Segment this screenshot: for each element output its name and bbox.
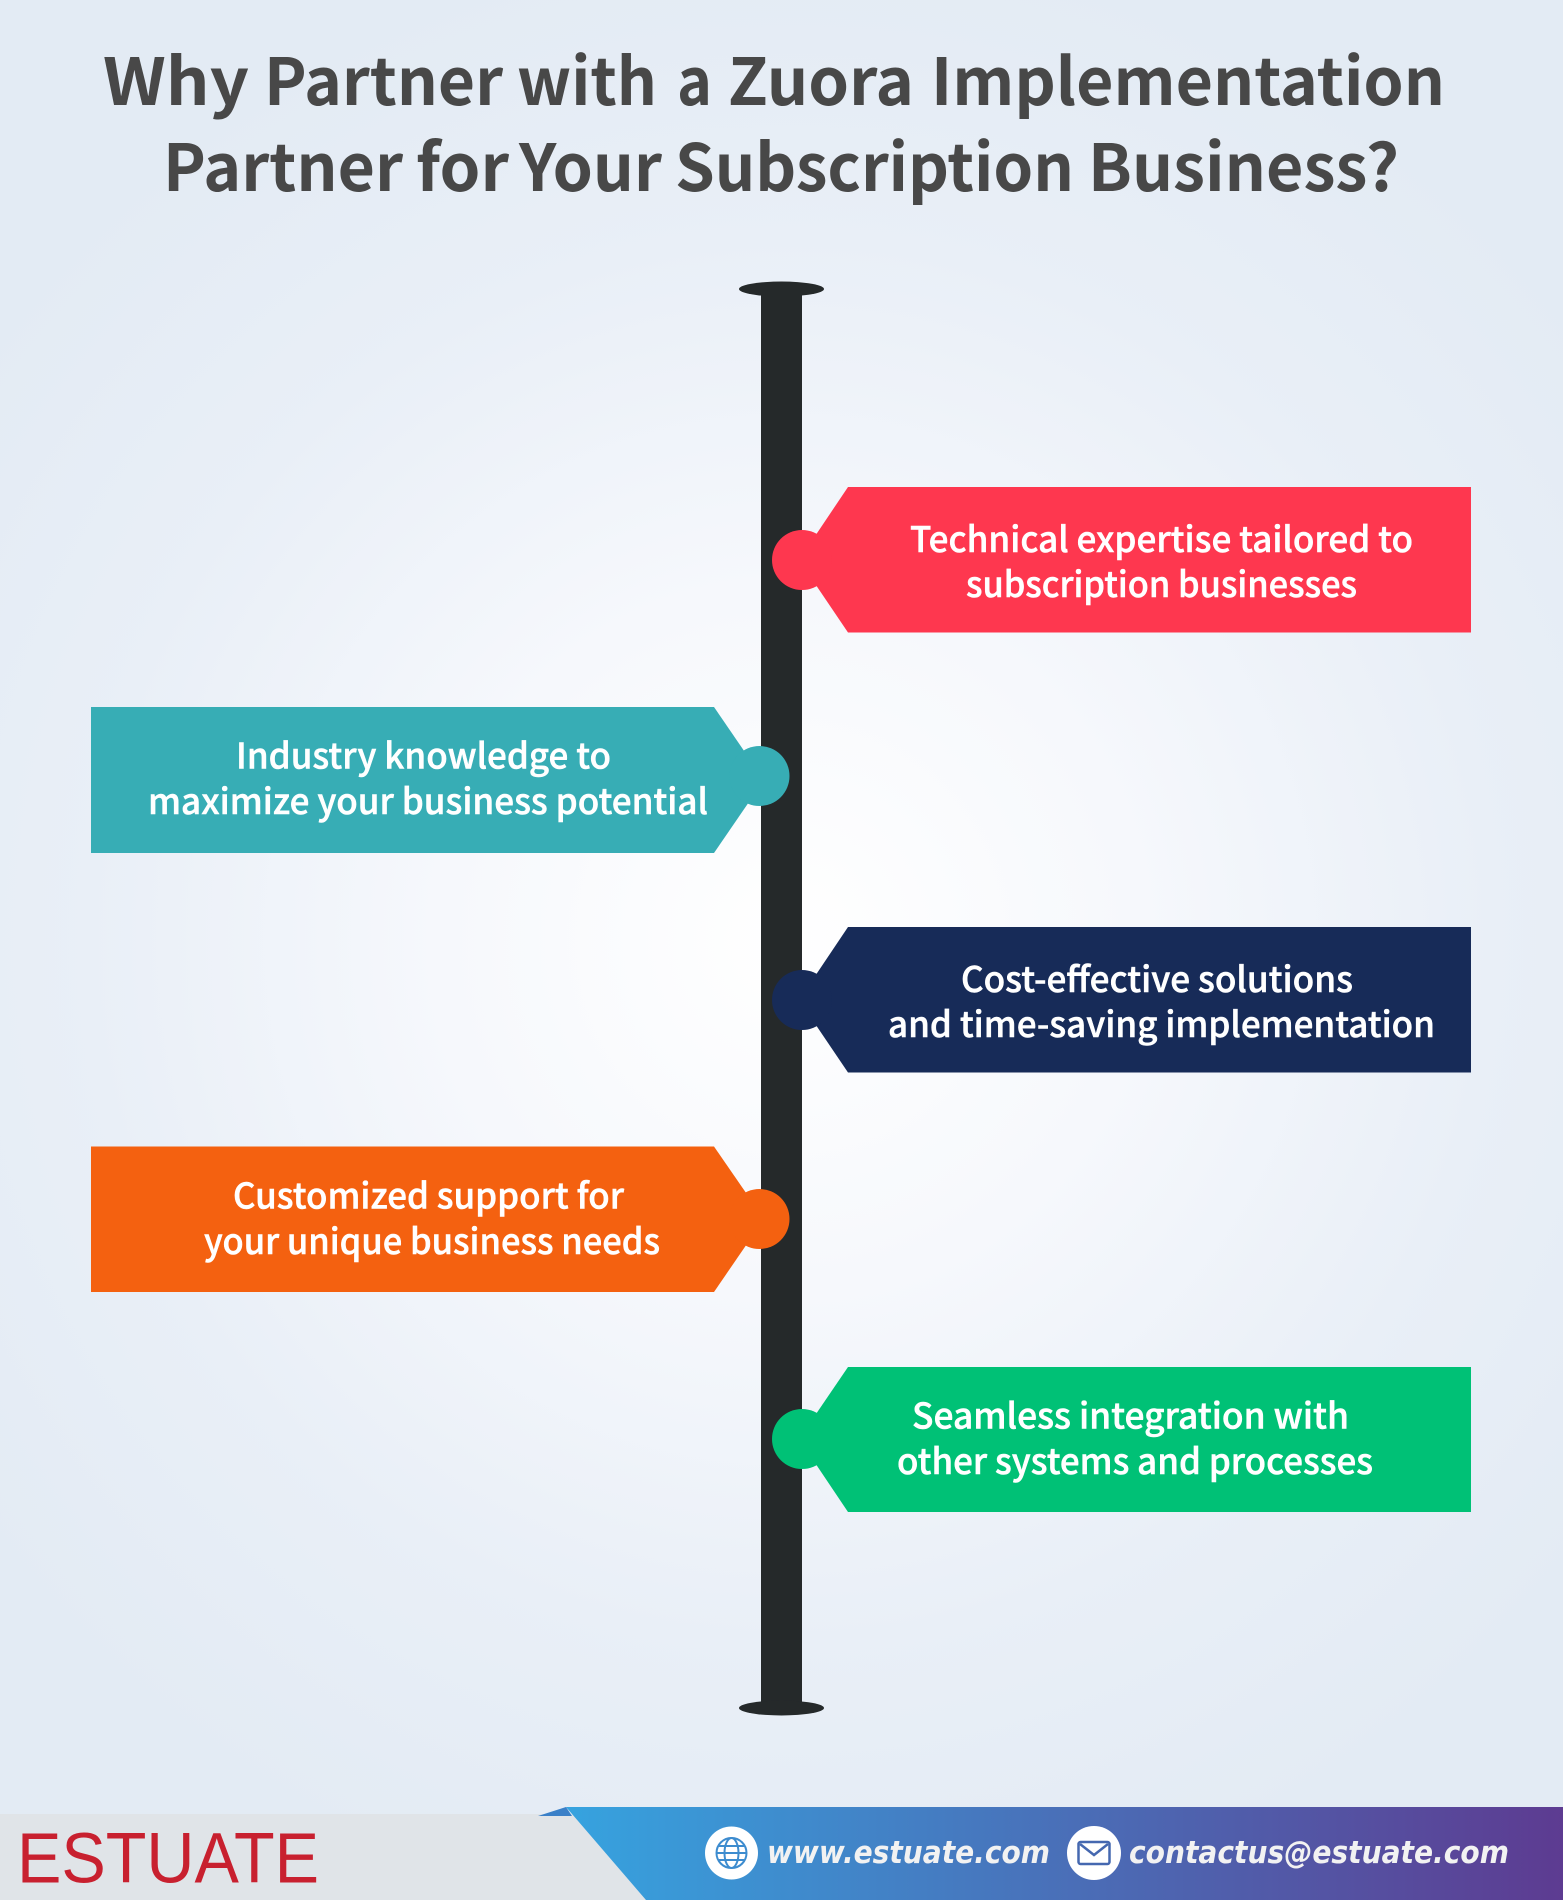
icon: globe — [705, 1826, 758, 1880]
logo: ESTUATE: ESTUATE — [17, 1820, 319, 1898]
panel: technical expertise: subscription businesses — [966, 557, 1357, 608]
panel: cost-effective solutions: and time-saving implementation — [888, 997, 1435, 1048]
title: Implementation — [931, 30, 1445, 124]
panel: technical expertise — [772, 487, 1471, 632]
title: Your — [518, 116, 663, 210]
title: Subscription — [675, 116, 1074, 210]
title: with — [517, 30, 657, 124]
panel: seamless integration — [772, 1367, 1471, 1512]
panel: cost-effective solutions — [772, 927, 1471, 1072]
panel: industry knowledge — [91, 707, 790, 853]
panel: seamless integration: Seamless integration with — [912, 1388, 1349, 1440]
panel: seamless integration: other systems and processes — [897, 1434, 1373, 1485]
panel: customized support: your unique business needs — [204, 1214, 660, 1265]
footer — [0, 1807, 1563, 1900]
title: a — [677, 30, 712, 124]
website link: www.estuate.com — [767, 1835, 1050, 1871]
title — [103, 30, 1445, 210]
title: Partner — [163, 116, 404, 210]
panel: cost-effective solutions: Cost-effective solutions — [961, 952, 1353, 1003]
panel: industry knowledge: maximize your business potential — [148, 774, 708, 825]
timeline pole — [739, 282, 824, 1716]
icon: envelope — [1067, 1826, 1121, 1880]
panel: technical expertise: Technical expertise tailored to — [910, 512, 1413, 563]
title: Zuora — [728, 30, 914, 124]
title: Partner — [264, 30, 504, 124]
email link: contactus@estuate.com — [1129, 1835, 1509, 1871]
title: Business? — [1088, 116, 1399, 210]
panel: industry knowledge: Industry knowledge to — [236, 728, 611, 780]
title: for — [416, 116, 510, 210]
title: Why — [103, 30, 249, 124]
panel: customized support: Customized support for — [233, 1168, 625, 1220]
panel: customized support — [91, 1146, 790, 1292]
